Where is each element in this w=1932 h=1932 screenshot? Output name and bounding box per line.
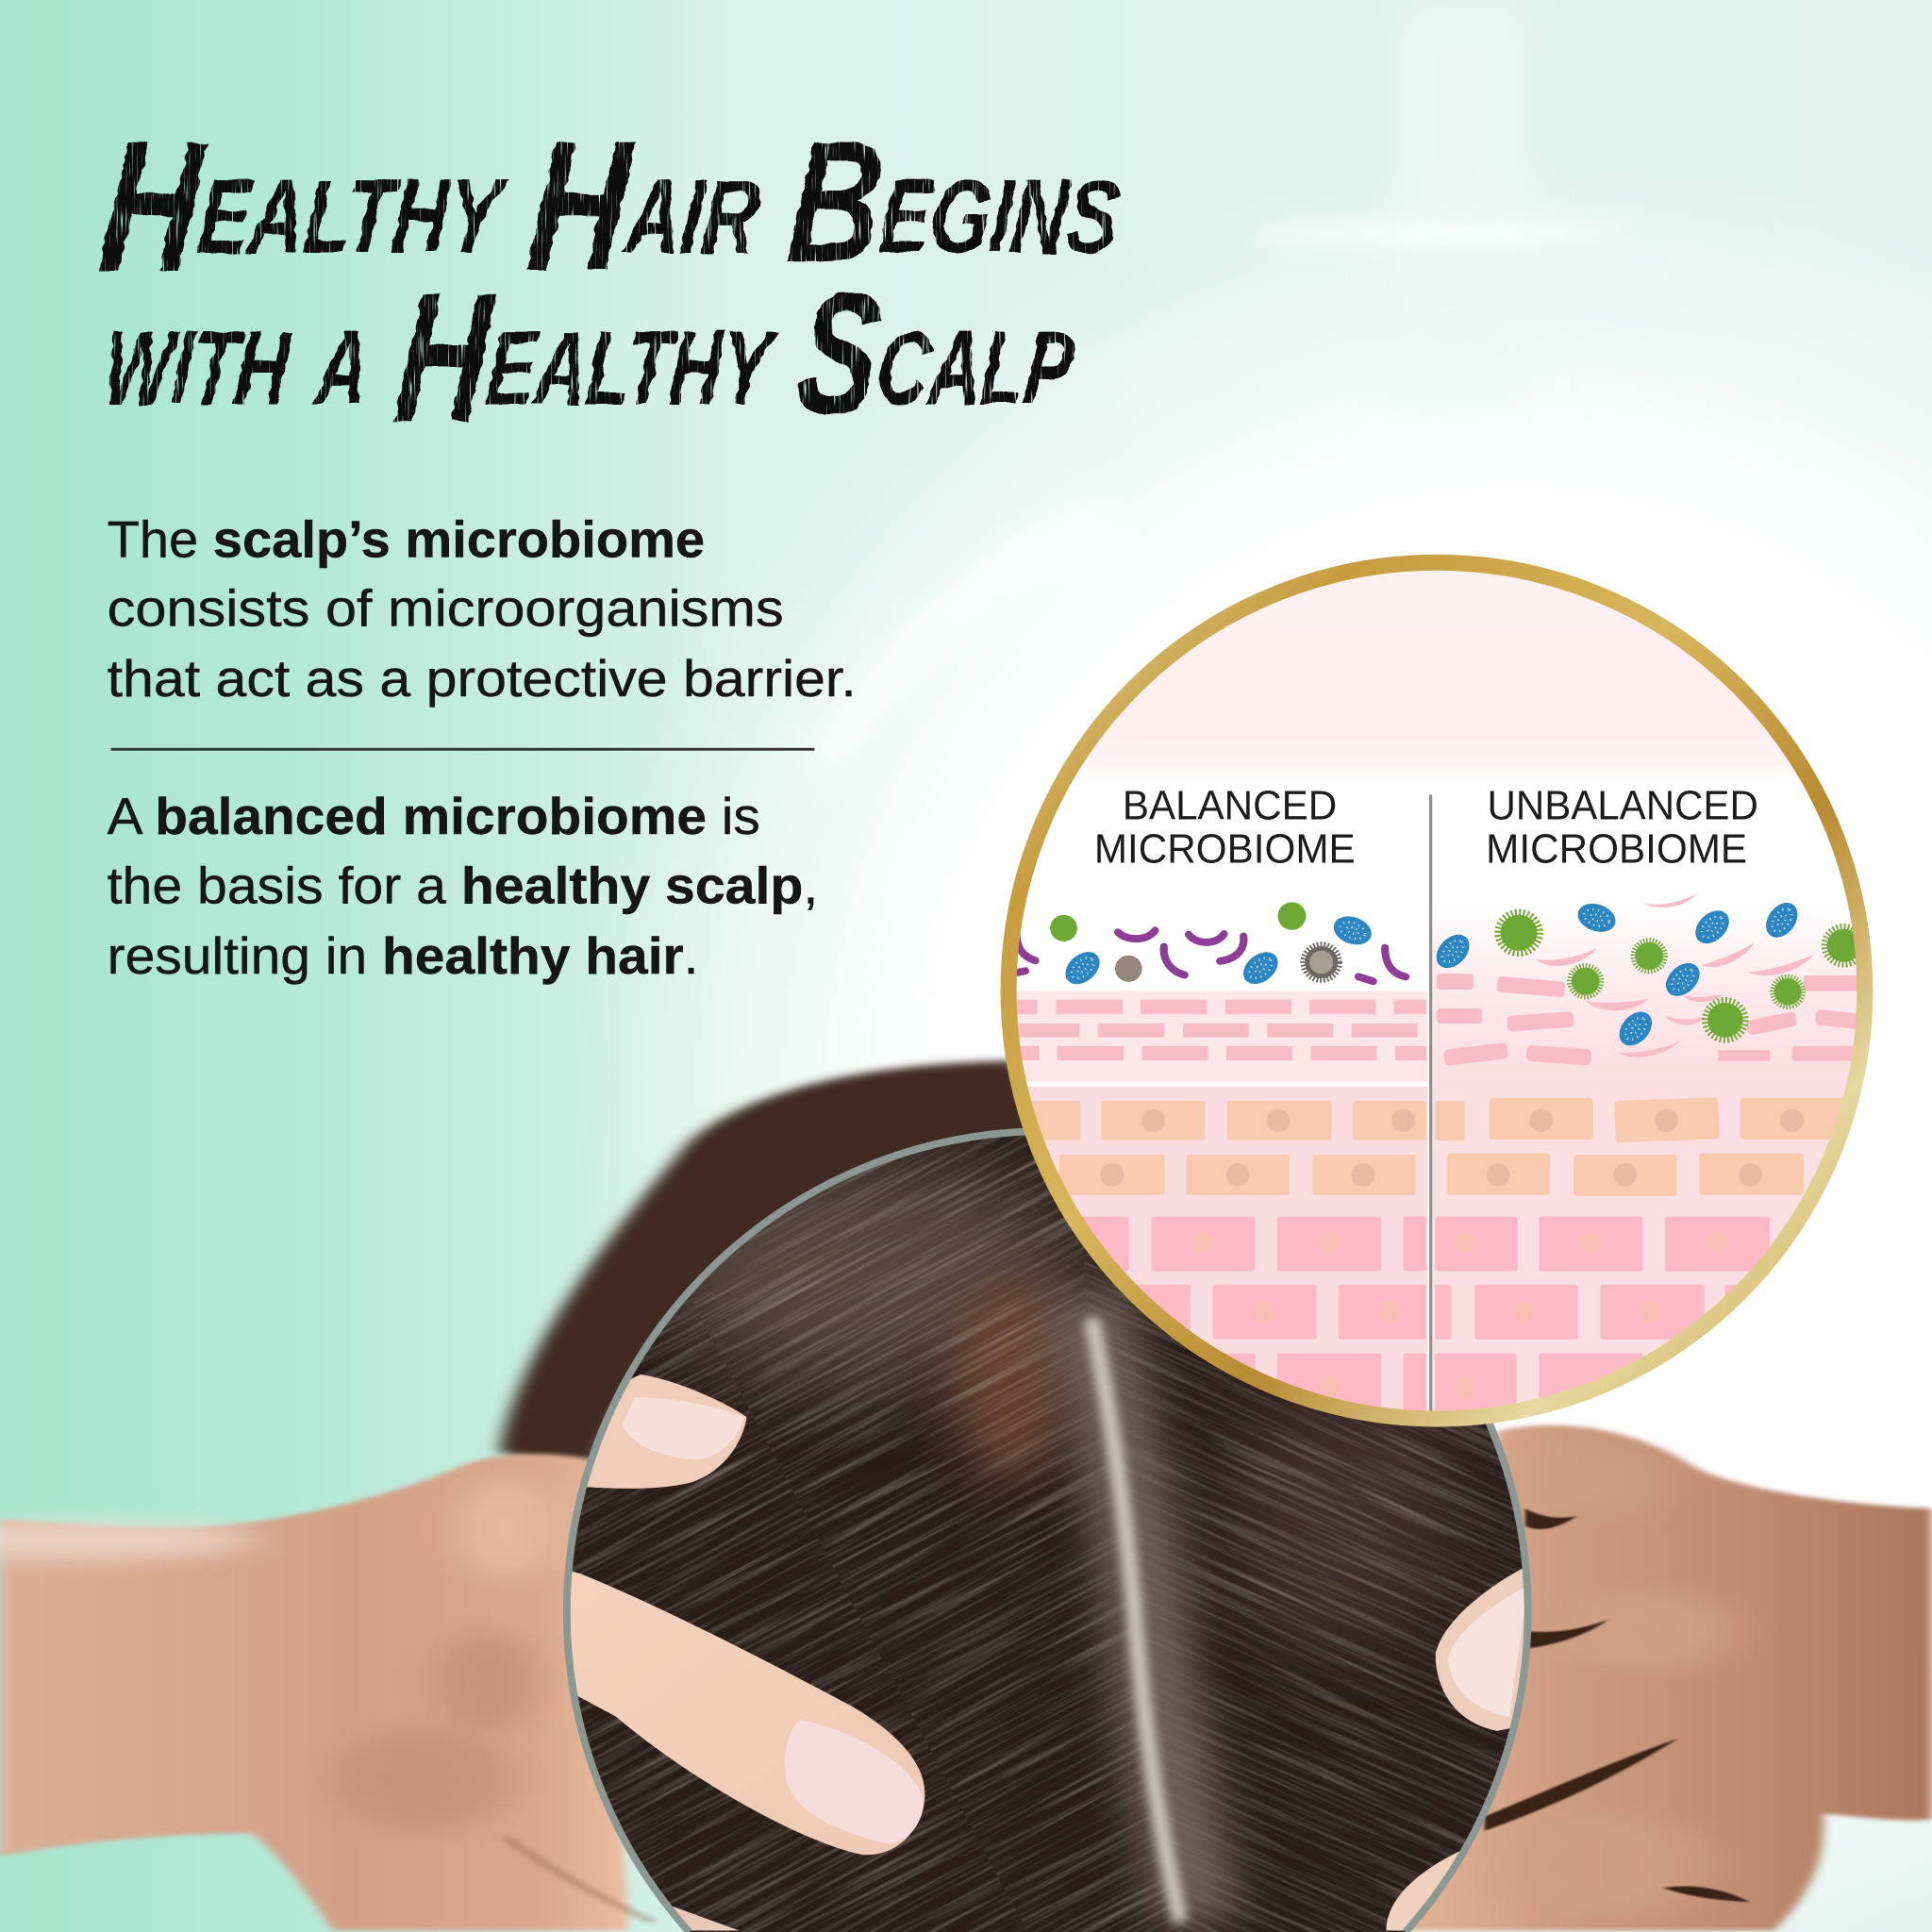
unbalanced side: scattered bricks [1437, 893, 1860, 1066]
blurred back hair [499, 1060, 1047, 1477]
left hand and arm [0, 1454, 653, 1931]
second paragraph [108, 787, 818, 985]
title: H [93, 102, 211, 309]
intro paragraph: The scalp’s microbiome [108, 509, 705, 568]
diagram contents [999, 560, 1872, 1427]
title: egins [874, 116, 1127, 285]
balanced microbes [1010, 902, 1406, 991]
second paragraph: A balanced microbiome is [108, 787, 760, 845]
balanced side: stratum bricks [1010, 1000, 1426, 1060]
title: air [618, 116, 797, 285]
second paragraph: resulting in healthy hair . [108, 926, 699, 985]
peach skin cells [1017, 1097, 1857, 1196]
label: unbalanced microbiome [1486, 783, 1758, 872]
title: S [791, 257, 888, 452]
unbalanced microbes [1430, 897, 1863, 1052]
title: calp [872, 268, 1082, 436]
label: balanced microbiome: MICROBIOME [1094, 825, 1356, 872]
gold magnifier circle: microbiome diagram [999, 560, 1872, 1427]
diagram background layers [999, 560, 1872, 1427]
title: H [522, 102, 640, 309]
lens contents: hair and fingers [542, 1109, 1553, 1932]
title: ealthy [482, 268, 807, 436]
cell nuclei [1100, 1109, 1804, 1398]
intro paragraph: consists of microorganisms [108, 579, 784, 638]
intro paragraph [108, 509, 857, 708]
title [93, 102, 1128, 461]
title: ealthy [192, 116, 539, 285]
magnifying lens over the scalp [542, 1109, 1553, 1932]
divider between balanced and unbalanced [1429, 794, 1432, 1414]
scalp hair [542, 1109, 1553, 1932]
right hand and arm [1392, 1425, 1932, 1931]
pink skin cells [1041, 1216, 1770, 1411]
divider rule [111, 748, 814, 751]
label: unbalanced microbiome: UNBALANCED [1487, 783, 1758, 829]
label: balanced microbiome: BALANCED [1123, 783, 1337, 829]
label: unbalanced microbiome: MICROBIOME [1486, 825, 1747, 872]
lens rim [567, 1131, 1528, 1932]
title: with a [99, 268, 501, 436]
label: balanced microbiome [1094, 783, 1356, 872]
title: B [781, 106, 890, 300]
title: H [389, 254, 500, 461]
intro paragraph: that act as a protective barrier. [108, 649, 857, 708]
gold ring [1008, 562, 1865, 1419]
second paragraph: the basis for a healthy scalp , [108, 856, 818, 914]
fingers inside lens [542, 1374, 1541, 1931]
